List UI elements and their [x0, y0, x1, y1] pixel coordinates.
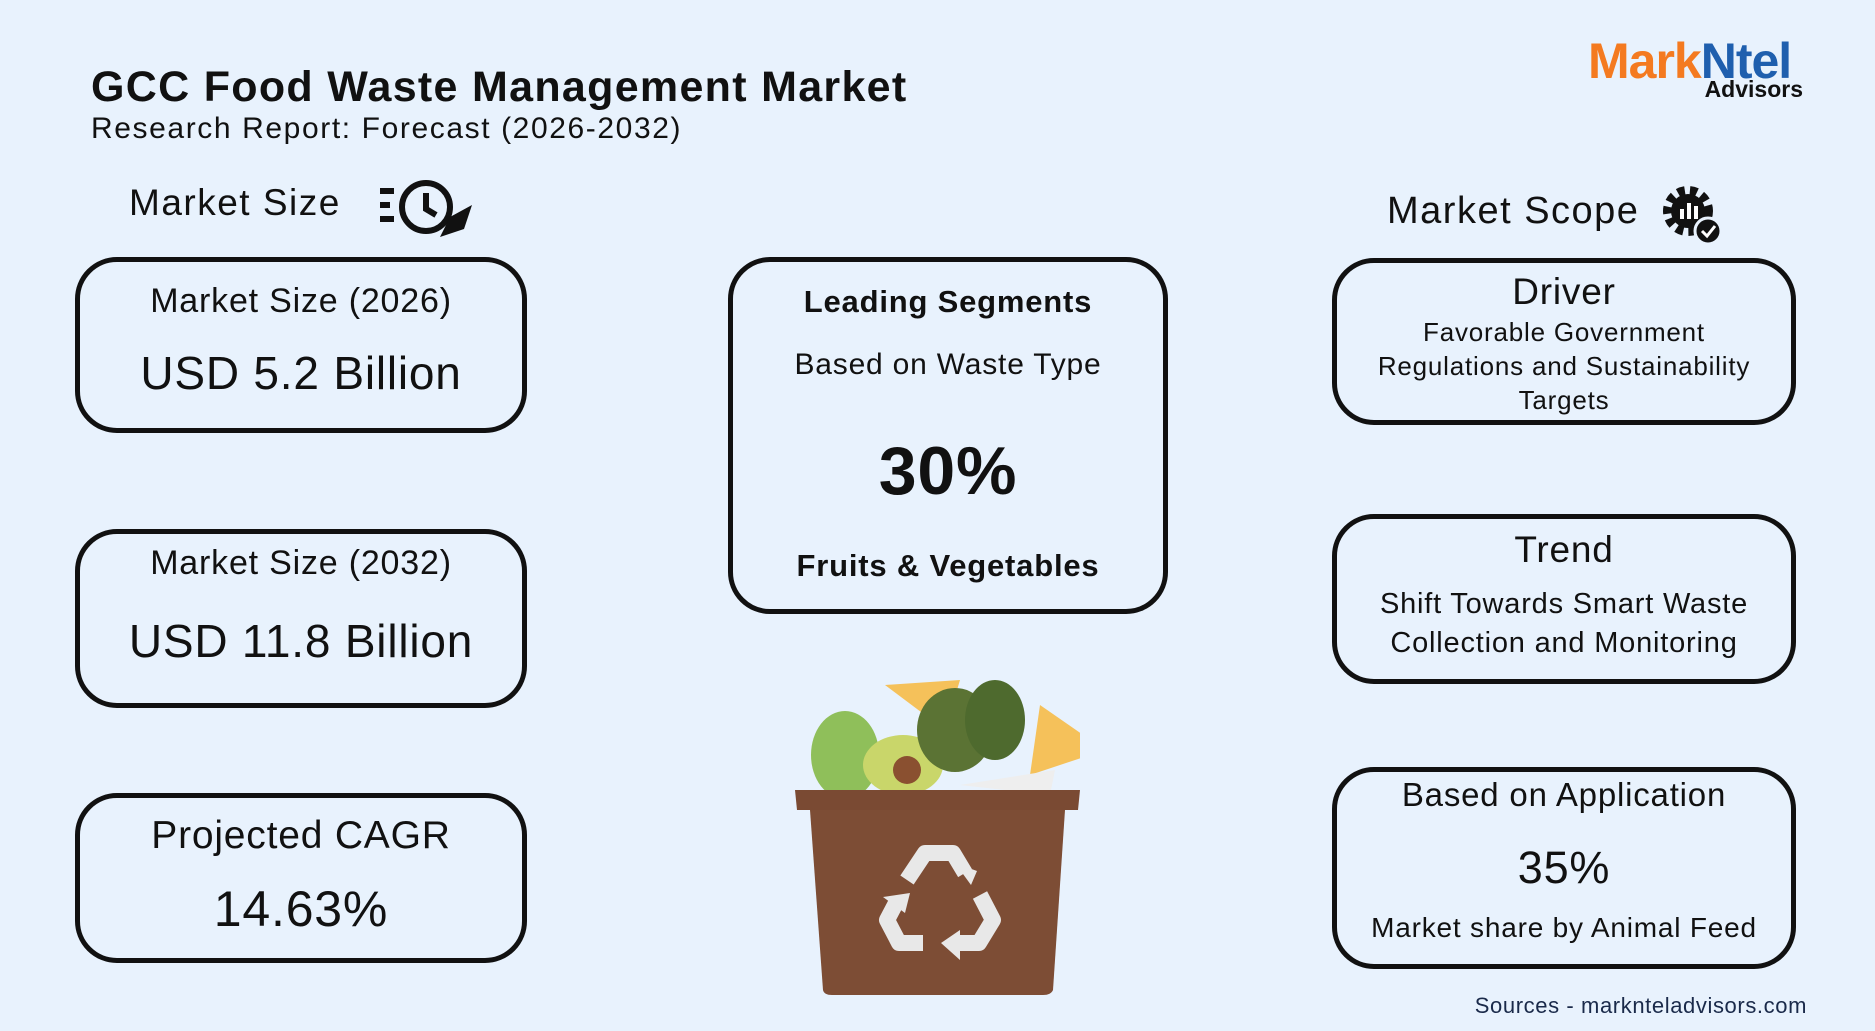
box: market size 2026: Market Size (2026)	[150, 282, 452, 320]
box: market size 2032	[75, 529, 527, 708]
title: GCC Food Waste Management Market	[91, 63, 908, 111]
box: market size 2032: USD 11.8 Billion	[129, 615, 473, 667]
box: application: 35%	[1518, 842, 1610, 893]
box: trend: Collection and Monitoring	[1390, 627, 1738, 659]
box: application: Based on Application	[1402, 776, 1726, 813]
heading: market size: Market Size	[129, 182, 341, 223]
logo: MarkNtel	[1588, 33, 1791, 89]
box: driver	[1332, 258, 1796, 425]
box: driver: Regulations and Sustainability	[1378, 351, 1750, 381]
box: market size 2026	[75, 257, 527, 433]
footer: sources: Sources - marknteladvisors.com	[1475, 993, 1807, 1018]
box: cagr	[75, 793, 527, 963]
illustration: waste bin with food	[795, 680, 1080, 995]
box: trend: Shift Towards Smart Waste	[1380, 588, 1748, 620]
icon: gear	[1663, 186, 1720, 242]
box: application	[1332, 767, 1796, 969]
box: trend	[1332, 514, 1796, 684]
heading: market scope: Market Scope	[1387, 190, 1639, 232]
panel: leading segments: Leading Segments	[804, 284, 1092, 319]
box: application: Market share by Animal Feed	[1371, 912, 1757, 943]
panel: leading segments: 30%	[879, 433, 1017, 509]
box: driver: Driver	[1512, 271, 1616, 312]
panel: leading segments: Based on Waste Type	[794, 348, 1102, 381]
box: driver: Favorable Government	[1423, 317, 1705, 347]
subtitle: Research Report: Forecast (2026-2032)	[91, 112, 682, 145]
logo: Advisors	[1705, 76, 1803, 102]
box: market size 2032: Market Size (2032)	[150, 544, 452, 582]
box: cagr: 14.63%	[214, 881, 388, 937]
panel: leading segments: Fruits & Vegetables	[797, 548, 1099, 583]
icon: clock rocket	[380, 180, 472, 237]
box: market size 2026: USD 5.2 Billion	[140, 347, 462, 399]
panel: leading segments	[728, 257, 1168, 614]
box: trend: Trend	[1514, 529, 1614, 570]
box: cagr: Projected CAGR	[151, 814, 451, 857]
box: driver: Targets	[1519, 385, 1609, 415]
